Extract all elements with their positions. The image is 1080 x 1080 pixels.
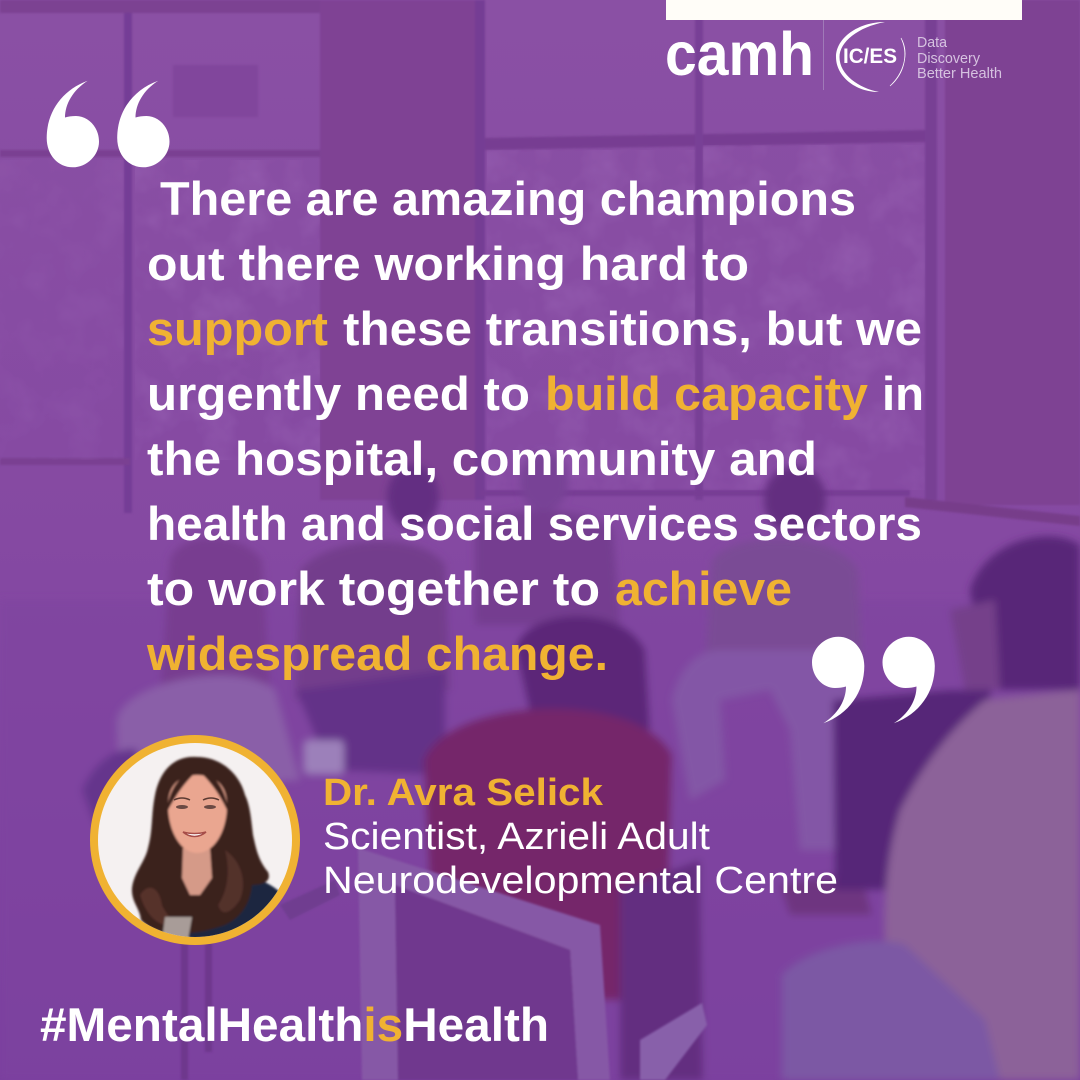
logo tagline: Better Health bbox=[917, 66, 1002, 82]
logo divider bbox=[823, 20, 824, 90]
quote line 7 bbox=[147, 562, 792, 615]
quote line 6: health and social services sectors bbox=[147, 497, 922, 550]
icon: opening quotation marks bbox=[47, 81, 170, 167]
window foliage texture bbox=[0, 145, 925, 490]
role line 2: Neurodevelopmental Centre bbox=[323, 860, 838, 902]
quote line 4: urgently need to bbox=[147, 367, 530, 420]
quote line 7: to work together to bbox=[147, 562, 600, 615]
logo: camh: camh bbox=[665, 20, 814, 88]
woman left bbox=[160, 538, 270, 700]
quote line 7: achieve bbox=[615, 562, 792, 615]
logo tagline: Discovery bbox=[917, 51, 981, 67]
face bbox=[168, 775, 227, 853]
hashtag: #MentalHealthisHealth bbox=[40, 998, 549, 1051]
quote line 5: the hospital, community and bbox=[147, 432, 817, 485]
front woman bbox=[516, 616, 650, 735]
name: Dr. Avra Selick bbox=[323, 772, 604, 814]
quote line 3: these transitions, but we bbox=[343, 302, 922, 355]
top white bar bbox=[666, 0, 1022, 20]
quote line 2: out there working hard to bbox=[147, 237, 749, 290]
quote text bbox=[146, 172, 924, 680]
right foreground man bbox=[970, 536, 1080, 690]
quote line 8: widespread change. bbox=[146, 627, 608, 680]
logo tagline bbox=[917, 35, 1002, 82]
icon: closing quotation marks bbox=[812, 637, 935, 723]
logos: camh and IC/ES bbox=[665, 20, 1002, 92]
navy top bbox=[158, 880, 278, 937]
man centre right bbox=[764, 466, 826, 534]
facial features bbox=[183, 832, 206, 836]
chairs bbox=[358, 848, 610, 1080]
seated people, simplified bbox=[0, 600, 1080, 1080]
man at back bbox=[520, 452, 568, 512]
quote line 3: support bbox=[147, 302, 328, 355]
sequined neckline bbox=[162, 917, 192, 940]
hair parting bbox=[166, 774, 193, 810]
quote line 4 bbox=[147, 367, 924, 420]
quote line 4: build capacity bbox=[545, 367, 868, 420]
logo tagline: Data bbox=[917, 35, 948, 51]
hair bbox=[132, 757, 269, 933]
attribution bbox=[323, 772, 838, 902]
woman back left bbox=[387, 465, 439, 529]
cup bbox=[304, 740, 344, 774]
quote line 4: in bbox=[882, 367, 924, 420]
portrait of Dr. Avra Selick bbox=[90, 735, 300, 945]
role line 1: Scientist, Azrieli Adult bbox=[323, 816, 710, 858]
logo: IC/ES mark bbox=[836, 22, 905, 92]
quote line 1: There are amazing champions bbox=[160, 172, 856, 225]
neck and chest bbox=[182, 848, 212, 895]
logo: IC/ES mark: IC/ES bbox=[843, 44, 897, 68]
